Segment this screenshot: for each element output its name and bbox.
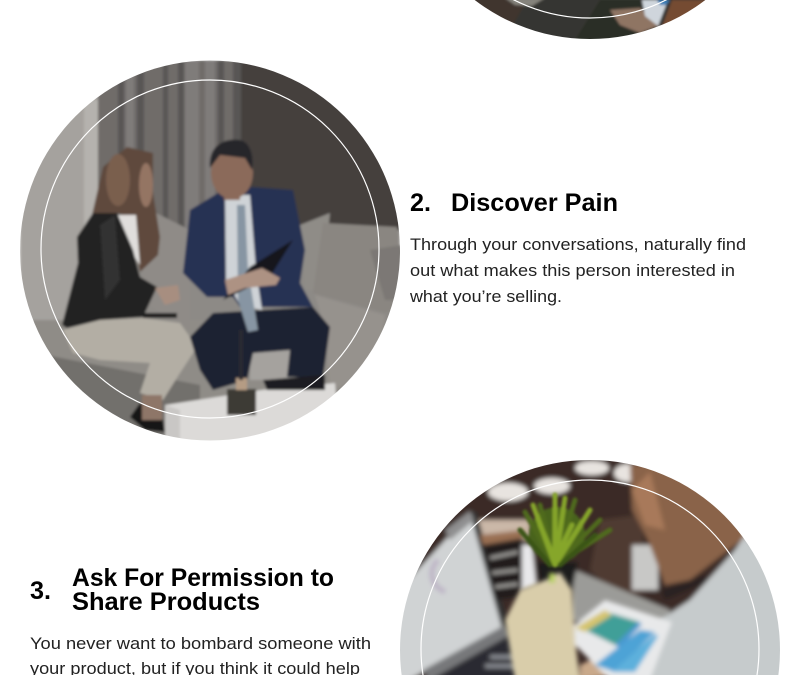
step 2 body text: out what makes this person interested in <box>410 261 735 280</box>
man head <box>627 464 744 588</box>
plant <box>520 495 610 565</box>
step 3 heading <box>72 564 334 616</box>
white cup <box>522 545 536 590</box>
man shirt <box>648 534 780 675</box>
paper with charts <box>574 600 672 675</box>
man <box>190 307 330 390</box>
coffee table <box>165 383 340 442</box>
laptop screen <box>400 520 505 675</box>
photo circle: step 1 meeting (cropped at top) <box>474 0 706 39</box>
step 3 number: 3. <box>30 577 51 605</box>
keyboard <box>442 640 514 675</box>
photo circle: step 3 laptop and charts <box>390 455 790 675</box>
blurred lights <box>488 461 642 501</box>
step 3 heading: Share Products <box>72 588 260 616</box>
step 2 body text: Through your conversations, naturally find <box>410 235 746 254</box>
step 3 body text <box>30 634 371 675</box>
sofa <box>34 320 70 340</box>
step 3 heading: Ask For Permission to <box>72 564 334 592</box>
hand <box>505 572 580 675</box>
woman <box>92 147 160 272</box>
right pillows <box>328 222 398 231</box>
step 2 body text <box>409 235 746 306</box>
grey curtains <box>97 60 234 226</box>
light curtain <box>20 97 98 320</box>
step 2 body text: what you’re selling. <box>409 287 562 306</box>
step 2 heading: Discover Pain <box>451 189 618 217</box>
chalkboard <box>483 537 522 600</box>
step 2 number: 2. <box>410 189 431 217</box>
pot <box>537 562 578 590</box>
step 3 body text: You never want to bombard someone with <box>30 634 371 653</box>
dark wall <box>241 60 401 230</box>
table <box>570 567 672 624</box>
photo circle: step 2 two people on a sofa <box>20 60 402 442</box>
